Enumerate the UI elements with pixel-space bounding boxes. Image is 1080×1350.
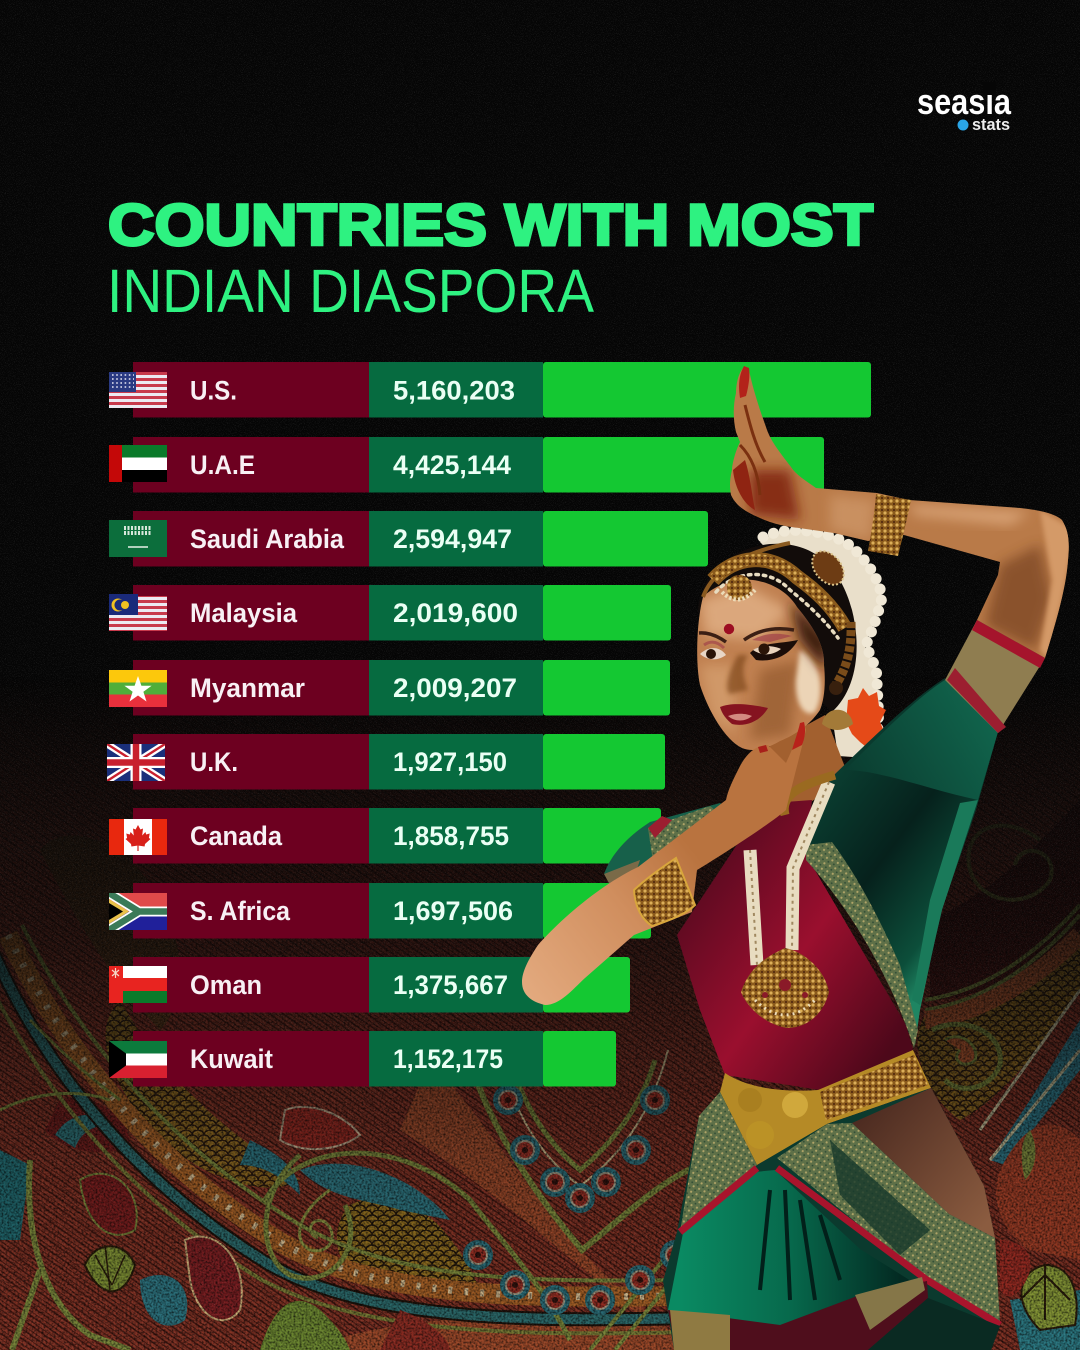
logo: seasia stats: stats bbox=[972, 115, 1010, 134]
row: Myanmar bbox=[109, 660, 670, 716]
dark fabric texture bbox=[0, 758, 1080, 1350]
flag: South Africa bbox=[109, 893, 167, 930]
title: INDIAN DIASPORA bbox=[107, 257, 594, 325]
row: U.S.: 5,160,203 bbox=[393, 376, 515, 406]
row: U.K. bbox=[107, 734, 665, 790]
row: S. Africa: S. Africa bbox=[190, 896, 291, 926]
row: Canada bbox=[109, 808, 661, 864]
skirt: green pleats bbox=[668, 1170, 927, 1350]
dancer: raised arm and hand bbox=[730, 366, 1075, 660]
row: U.K.: 1,927,150 bbox=[393, 747, 507, 777]
flag: Malaysia bbox=[109, 594, 167, 631]
row: Myanmar: 2,009,207 bbox=[393, 673, 517, 703]
teal blotches bbox=[240, 1140, 300, 1195]
dancer: bindi bbox=[724, 624, 734, 634]
illustration: Bharatanatyam dancer bbox=[522, 366, 1075, 1350]
dancer: face bbox=[697, 580, 830, 750]
skirt: red borders bbox=[680, 1168, 1000, 1325]
dancer: left shoulder sleeve bbox=[604, 803, 735, 874]
row: Kuwait: Kuwait bbox=[190, 1044, 273, 1074]
row: Kuwait: 1,152,175 bbox=[393, 1044, 503, 1074]
big sweeping teal band bbox=[0, 945, 690, 1319]
row: U.A.E bbox=[109, 437, 824, 492]
row: U.A.E: U.A.E bbox=[190, 450, 255, 480]
row: U.K.: U.K. bbox=[190, 747, 238, 777]
row: Saudi Arabia: Saudi Arabia bbox=[190, 524, 345, 554]
row: Saudi Arabia bbox=[109, 511, 708, 566]
dancer: finger details bbox=[739, 366, 749, 398]
title: COUNTRIES WITH MOST bbox=[108, 193, 873, 258]
dancer: gold-green shoulder drape bbox=[806, 842, 918, 1048]
row: Myanmar: Myanmar bbox=[190, 673, 305, 703]
skirt: right drape bbox=[777, 1123, 1000, 1323]
flag: UAE bbox=[109, 445, 167, 482]
dancer: green sleeve with gold band bbox=[806, 620, 1045, 1045]
row: Oman: 1,375,667 bbox=[393, 970, 508, 1000]
dancer: lips bbox=[720, 704, 768, 725]
row: Kuwait bbox=[109, 1031, 616, 1086]
flag: Canada bbox=[109, 819, 167, 855]
dancer: gold headband and tikka bbox=[703, 543, 851, 686]
row: Saudi Arabia: 2,594,947 bbox=[393, 524, 512, 554]
row: Canada: Canada bbox=[190, 821, 283, 851]
row: U.S.: U.S. bbox=[190, 376, 237, 406]
dancer: bangles on raised wrist bbox=[868, 494, 911, 556]
paisley fabric backdrop bbox=[0, 736, 1080, 1350]
row: Oman: Oman bbox=[190, 970, 262, 1000]
row: Malaysia: 2,019,600 bbox=[393, 598, 518, 628]
skirt: left drape bbox=[680, 1092, 757, 1232]
dancer: face shading bbox=[700, 585, 830, 740]
bar chart: diaspora by country bbox=[107, 362, 871, 1086]
orange field lower centre bbox=[344, 1086, 674, 1350]
dancer: gold bangles bbox=[634, 858, 695, 926]
lower-left motifs bbox=[85, 1246, 135, 1291]
title bbox=[107, 193, 873, 325]
dancer: eyes bbox=[699, 629, 798, 660]
row: S. Africa bbox=[109, 883, 651, 938]
dancer: skirt bbox=[663, 1088, 1000, 1350]
dancer: gold pendant bbox=[741, 948, 829, 1028]
dancer: arm shading bbox=[750, 470, 1075, 660]
flag: Saudi Arabia bbox=[109, 520, 167, 557]
dancer: hair bbox=[698, 544, 857, 712]
logo: seasia stats: seasia bbox=[917, 81, 1012, 122]
flag: Oman bbox=[109, 966, 167, 1003]
flag: Myanmar bbox=[109, 670, 167, 707]
dancer: gold belt bbox=[720, 1050, 931, 1165]
dancer: pearl necklace bbox=[750, 775, 835, 965]
row: Oman bbox=[109, 957, 630, 1012]
gold scale areas bbox=[106, 1000, 300, 1188]
row: U.S. bbox=[109, 362, 871, 418]
teal lobe chain bbox=[493, 1085, 523, 1115]
logo: seasia stats bbox=[917, 81, 1012, 134]
row: U.A.E: 4,425,144 bbox=[393, 450, 511, 480]
row: Canada: 1,858,755 bbox=[393, 821, 509, 851]
swirl motif bbox=[300, 1190, 332, 1251]
red flower motifs bbox=[280, 1107, 360, 1149]
dancer: lower arm and hand bbox=[522, 722, 806, 1005]
row: Malaysia: Malaysia bbox=[190, 598, 298, 628]
dancer: neck bbox=[765, 715, 848, 810]
row: Malaysia bbox=[109, 585, 671, 640]
row: S. Africa: 1,697,506 bbox=[393, 896, 513, 926]
dancer: red blouse bbox=[677, 800, 913, 1090]
flag: United Kingdom bbox=[107, 744, 165, 781]
flag: United States bbox=[109, 372, 167, 408]
right-side motifs bbox=[930, 800, 1080, 1000]
flag: Kuwait bbox=[109, 1041, 167, 1078]
olive V bands bbox=[476, 1086, 690, 1254]
skirt: bottom border bbox=[668, 1281, 928, 1350]
dancer: white jasmine hair flowers bbox=[760, 530, 881, 766]
dancer: earring and orange flower bbox=[822, 681, 886, 750]
